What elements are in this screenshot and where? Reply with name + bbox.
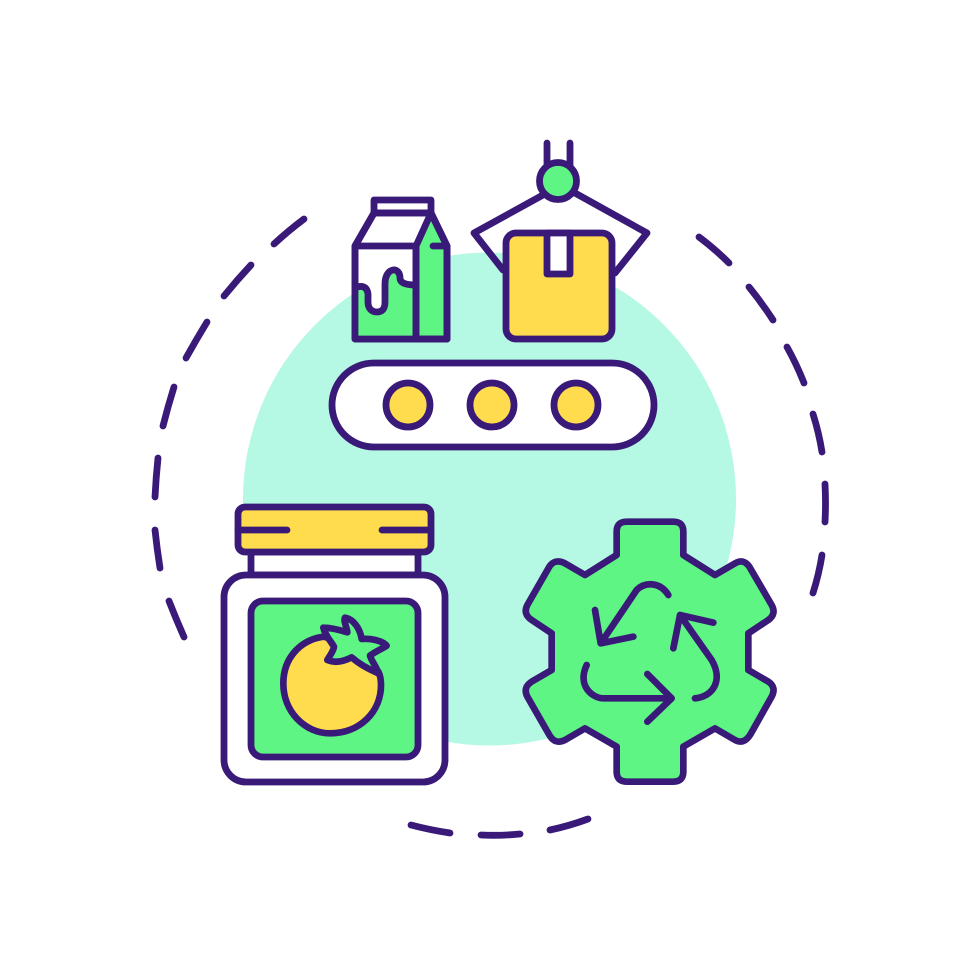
icon: robotic claw and box (474, 143, 647, 339)
icon: tomato jar (224, 507, 445, 782)
icon: conveyor belt (332, 363, 654, 447)
icon: milk carton (355, 200, 447, 339)
background mint circle (243, 252, 736, 746)
dashed ring (155, 219, 826, 835)
icon: gear with recycling arrows (526, 522, 774, 782)
